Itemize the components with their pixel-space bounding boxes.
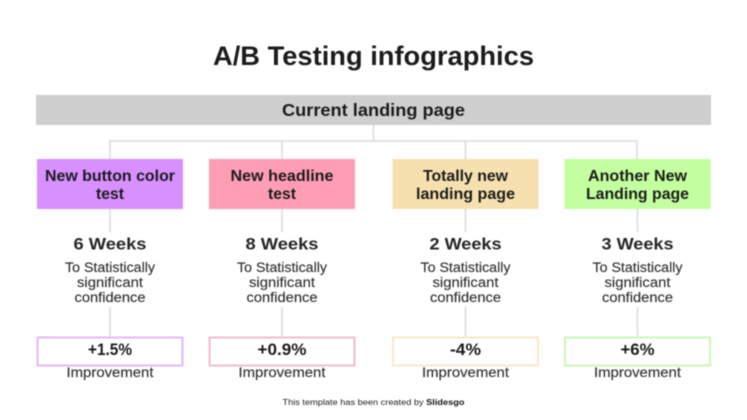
test box: new button color: test bbox=[96, 186, 124, 203]
column 1: new button color test bbox=[37, 159, 183, 380]
improvement label: Improvement bbox=[422, 364, 509, 380]
connector: box to duration bbox=[636, 209, 638, 232]
connector: description to result bbox=[464, 307, 466, 336]
column 3: totally new landing page bbox=[392, 159, 538, 380]
description: To Statistically bbox=[420, 260, 511, 275]
description: confidence bbox=[602, 290, 673, 305]
description bbox=[592, 260, 683, 305]
connector: box to duration bbox=[109, 209, 111, 232]
result box bbox=[565, 338, 710, 366]
connector: description to result bbox=[636, 307, 638, 336]
test box: new headline: test bbox=[268, 186, 296, 203]
title: A/B Testing infographics bbox=[213, 41, 534, 71]
test box: new button color bbox=[37, 159, 183, 209]
duration: 8 Weeks bbox=[246, 234, 318, 254]
improvement label: Improvement bbox=[238, 364, 326, 380]
test box: another new landing page bbox=[564, 159, 710, 209]
description bbox=[237, 260, 327, 305]
description: significant bbox=[432, 275, 499, 290]
duration: 6 Weeks bbox=[74, 234, 146, 254]
result box bbox=[393, 338, 538, 366]
test box: new button color: New button color bbox=[45, 168, 175, 185]
result box: +0.9% bbox=[258, 341, 307, 359]
connector lines from banner to test boxes bbox=[110, 125, 637, 159]
result box: -4% bbox=[450, 341, 481, 359]
duration: 3 Weeks bbox=[602, 234, 674, 254]
description: To Statistically bbox=[237, 260, 327, 275]
description: confidence bbox=[74, 290, 146, 305]
connector: description to result bbox=[281, 307, 283, 336]
column 2: new headline test bbox=[209, 159, 355, 380]
description: To Statistically bbox=[592, 260, 683, 275]
result box bbox=[38, 338, 182, 366]
description: To Statistically bbox=[65, 260, 155, 275]
footer credit: This template has been created by Slidesgo bbox=[282, 398, 465, 407]
test box: another new landing page: Another New bbox=[588, 168, 688, 185]
test box: new headline bbox=[209, 159, 355, 209]
improvement label: Improvement bbox=[66, 364, 154, 380]
description: significant bbox=[604, 275, 671, 290]
result box: +1.5% bbox=[88, 341, 132, 359]
description: confidence bbox=[246, 290, 318, 305]
description: significant bbox=[249, 275, 315, 290]
test box: totally new landing page bbox=[392, 159, 538, 209]
test box: new headline: New headline bbox=[230, 168, 334, 185]
banner: current landing page bbox=[36, 95, 711, 125]
test box: totally new landing page: Totally new bbox=[423, 168, 509, 185]
description: confidence bbox=[430, 290, 501, 305]
test box: another new landing page: Landing page bbox=[586, 186, 689, 203]
improvement label: Improvement bbox=[594, 364, 681, 380]
description: significant bbox=[77, 275, 143, 290]
result box: +6% bbox=[620, 341, 655, 359]
column 4: another new landing page bbox=[564, 159, 710, 380]
duration: 2 Weeks bbox=[430, 234, 502, 254]
connector: box to duration bbox=[464, 209, 466, 232]
banner: current landing page: Current landing page bbox=[282, 100, 465, 120]
description bbox=[420, 260, 511, 305]
description bbox=[65, 260, 155, 305]
test box: totally new landing page: landing page bbox=[416, 186, 515, 203]
connector: description to result bbox=[109, 307, 111, 336]
result box bbox=[210, 338, 354, 366]
connector: box to duration bbox=[281, 209, 283, 232]
